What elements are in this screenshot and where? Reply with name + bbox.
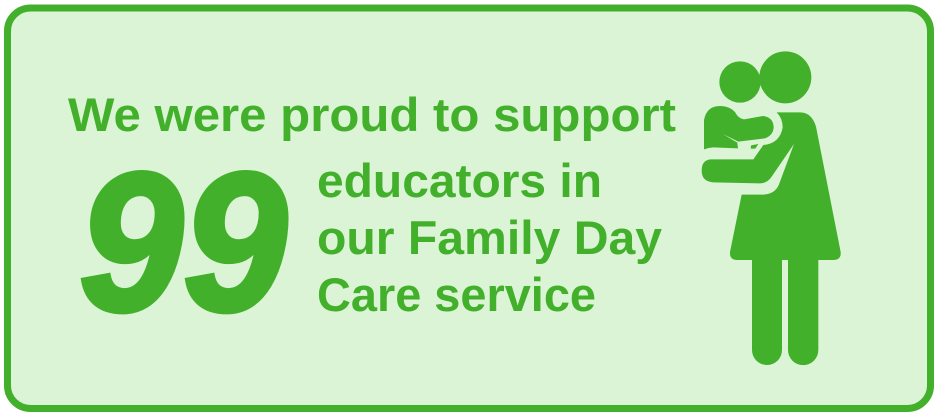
text block: educators description bbox=[317, 154, 662, 321]
small gap detail bbox=[751, 144, 758, 149]
line: our Family Day: our Family Day bbox=[317, 211, 662, 264]
left leg bbox=[752, 240, 782, 365]
right leg bbox=[788, 240, 818, 365]
mother head bbox=[759, 51, 811, 103]
icon: mother holding child bbox=[702, 51, 841, 365]
line: educators in: educators in bbox=[317, 154, 602, 207]
child body bbox=[704, 106, 774, 149]
child head bbox=[719, 61, 761, 103]
heading: proud to support: We were proud to support bbox=[68, 88, 676, 141]
mother dress and arm bbox=[702, 112, 841, 260]
big number: 99: 99 bbox=[79, 132, 287, 352]
line: Care service: Care service bbox=[317, 268, 596, 321]
